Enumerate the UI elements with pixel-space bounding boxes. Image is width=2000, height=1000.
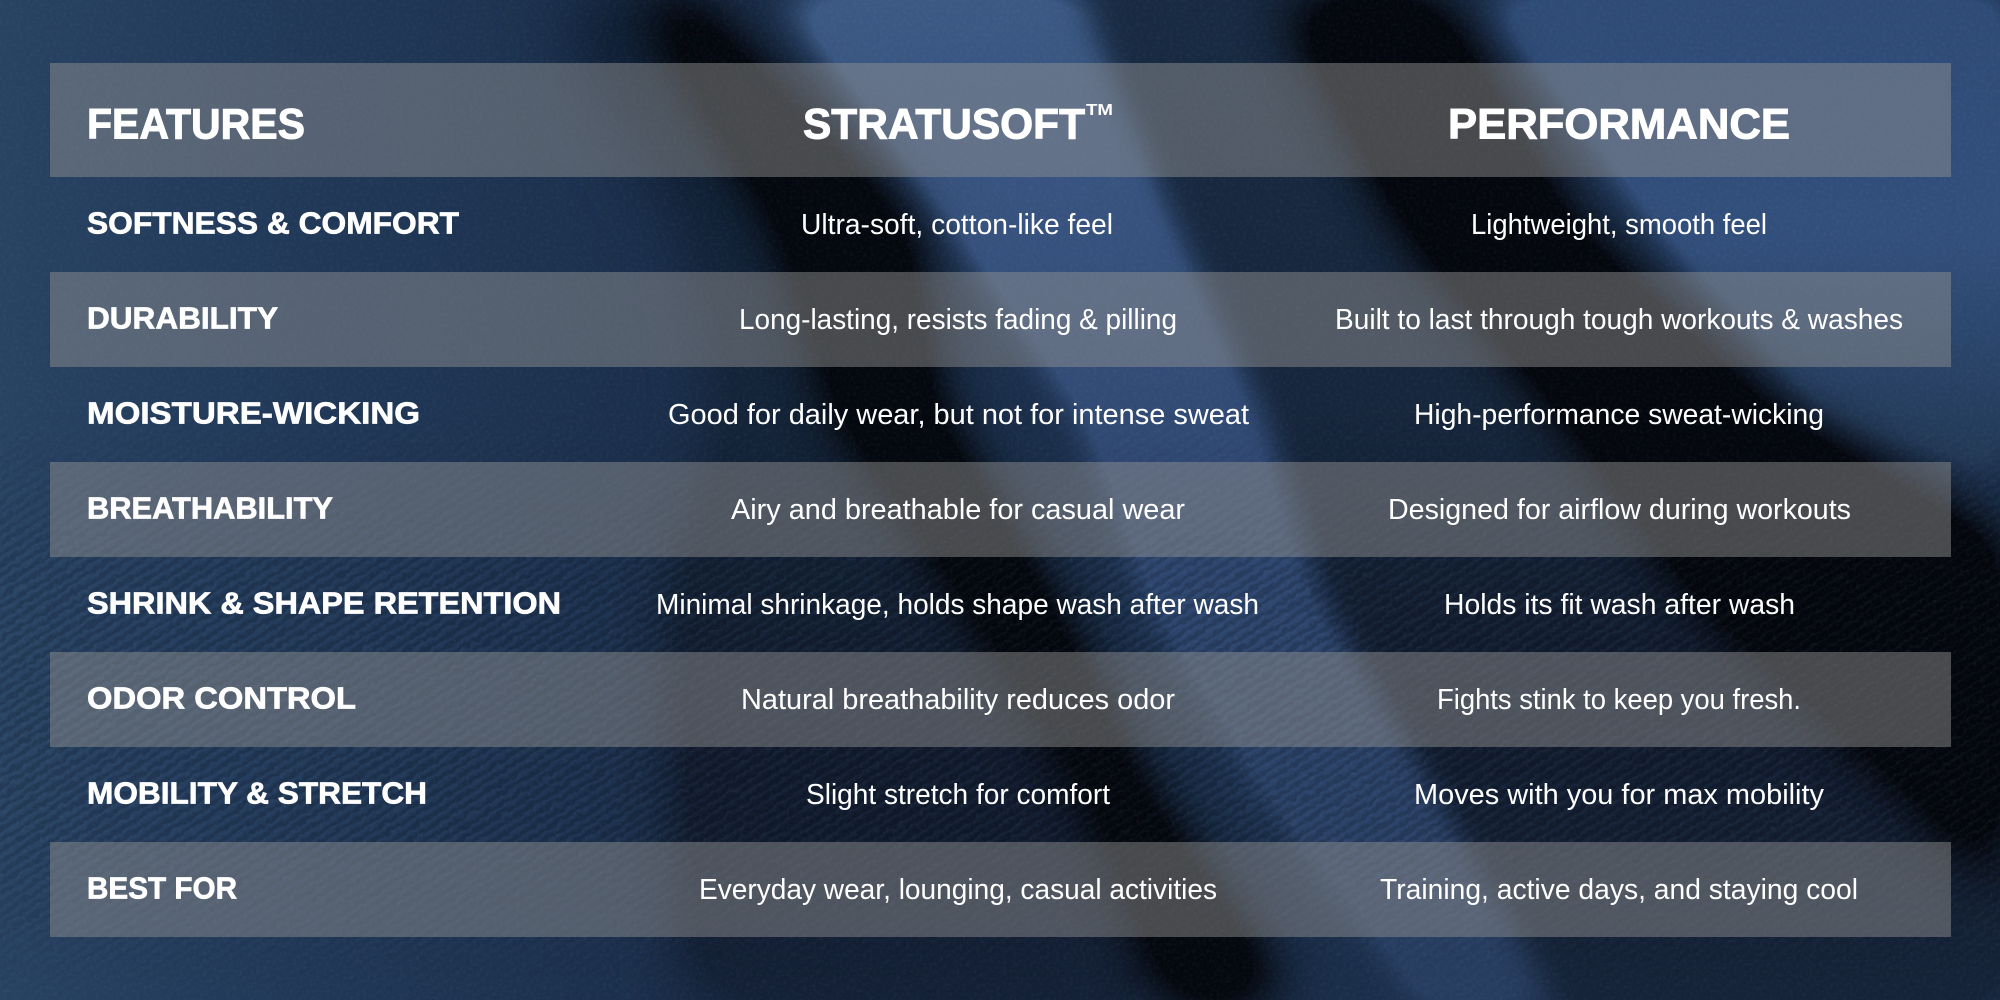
row: shrink and shape retention [87, 586, 1795, 621]
row: breathability: Designed for airflow during workouts [1388, 494, 1851, 526]
row: best for: BEST FOR [87, 870, 237, 906]
row: moisture-wicking [87, 396, 1824, 431]
row: moisture-wicking: Good for daily wear, but not for intense sweat [668, 399, 1249, 431]
heading: stratusoft: TM [1086, 102, 1113, 119]
row: mobility and stretch: MOBILITY & STRETCH [87, 776, 427, 810]
row: breathability [50, 462, 1951, 557]
row: durability: Built to last through tough workouts & washes [1335, 304, 1903, 336]
row: durability: Long-lasting, resists fading & pilling [739, 304, 1177, 336]
row: moisture-wicking: High-performance sweat-wicking [1414, 399, 1824, 431]
row: breathability: BREATHABILITY [87, 490, 333, 526]
header row [50, 63, 1951, 177]
row: mobility and stretch: Slight stretch for comfort [806, 779, 1110, 811]
row: shrink and shape retention: SHRINK & SHAPE RETENTION [87, 586, 561, 620]
row: mobility and stretch: Moves with you for max mobility [1414, 779, 1824, 811]
row: softness and comfort [87, 206, 1767, 241]
row: moisture-wicking: MOISTURE-WICKING [87, 396, 420, 430]
row: softness and comfort: Lightweight, smooth feel [1471, 209, 1767, 241]
heading: performance: PERFORMANCE [1448, 100, 1790, 148]
row: odor control: Fights stink to keep you fresh. [1437, 684, 1801, 716]
row: softness and comfort: Ultra-soft, cotton-like feel [801, 209, 1113, 241]
row: best for [50, 842, 1951, 937]
heading: stratusoft: STRATUSOFT [803, 100, 1085, 148]
row: shrink and shape retention: Minimal shrinkage, holds shape wash after wash [656, 589, 1259, 621]
row: shrink and shape retention: Holds its fit wash after wash [1444, 589, 1795, 621]
row: durability: DURABILITY [87, 300, 278, 336]
row: odor control [50, 652, 1951, 747]
row: odor control: Natural breathability reduces odor [741, 684, 1175, 716]
row: mobility and stretch [87, 776, 1824, 811]
row: durability [50, 272, 1951, 367]
row: breathability: Airy and breathable for casual wear [731, 494, 1185, 526]
heading: features: FEATURES [87, 100, 305, 148]
row: odor control: ODOR CONTROL [87, 680, 356, 716]
row: best for: Everyday wear, lounging, casual activities [699, 874, 1217, 906]
row: best for: Training, active days, and staying cool [1380, 874, 1858, 906]
row: softness and comfort: SOFTNESS & COMFORT [87, 206, 459, 240]
